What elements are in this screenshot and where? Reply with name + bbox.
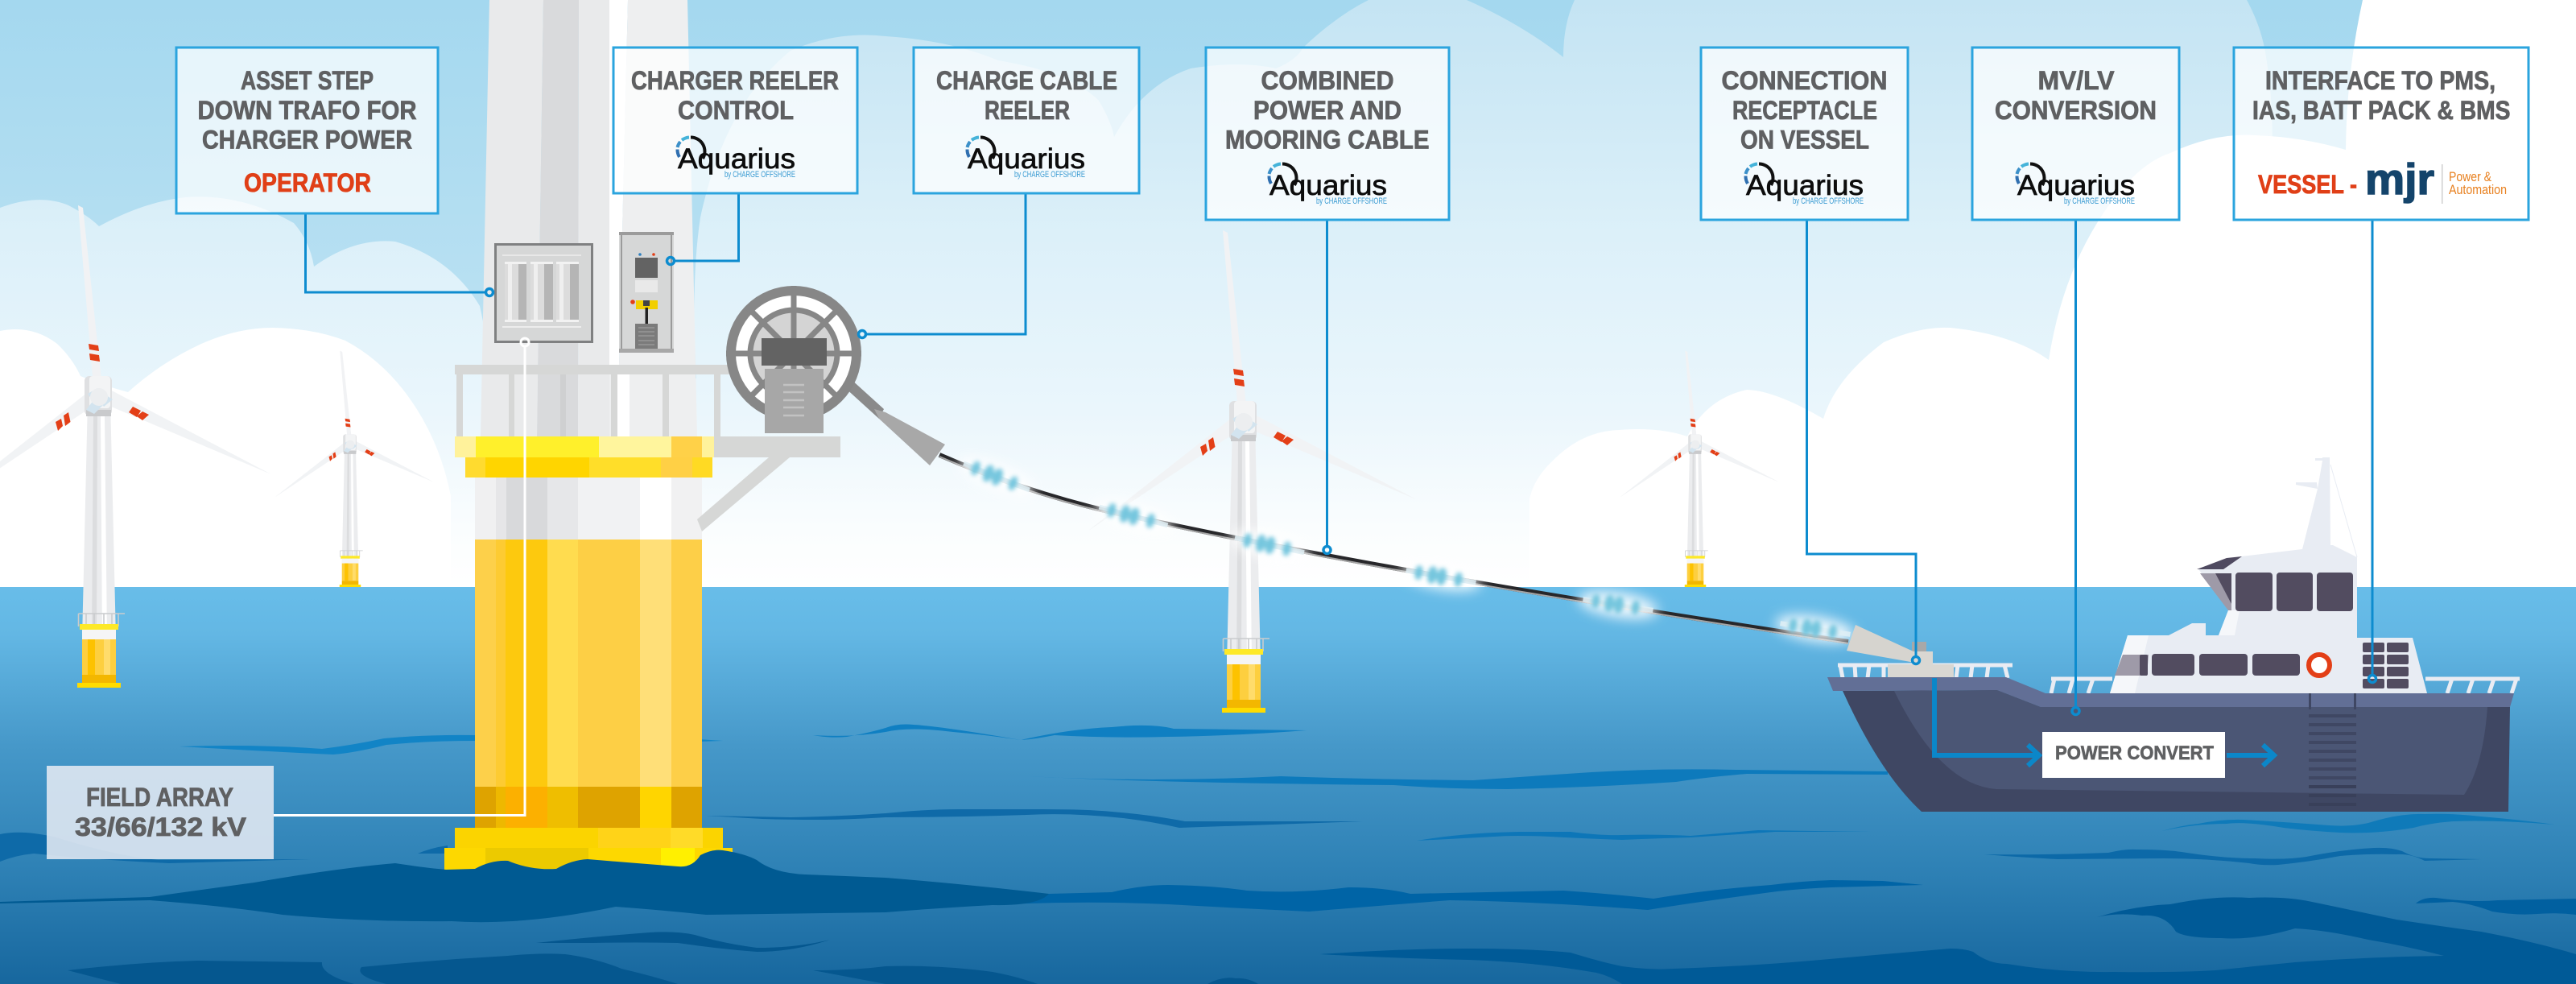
label: charge cable reeler <box>914 48 1139 193</box>
label: interface to PMS: Power & <box>2449 169 2492 184</box>
superstructure <box>2110 457 2427 693</box>
connector: MV/LV conversion <box>2072 220 2079 715</box>
label: asset step down trafo: CHARGER POWER <box>202 126 412 155</box>
upper tower <box>481 0 697 436</box>
label: interface to PMS: VESSEL - <box>2258 170 2357 199</box>
label: combined power and mooring cable: COMBINED <box>1261 66 1394 95</box>
small wind turbine right <box>1619 350 1780 587</box>
label: MV/LV conversion: MV/LV <box>2038 66 2115 95</box>
step-down transformer cabinet <box>496 245 592 341</box>
front white clouds <box>0 0 2576 587</box>
hull ladder <box>2309 693 2356 806</box>
lower deck windows <box>2115 654 2300 676</box>
connector: charger reeler control <box>667 193 739 264</box>
connector: combined cable <box>1323 220 1331 554</box>
far wind turbine left <box>0 205 271 688</box>
centre wind turbine <box>1088 230 1416 713</box>
yellow column <box>475 540 702 828</box>
label: interface to PMS <box>2234 48 2529 220</box>
main turbine tower and foundation <box>444 0 840 892</box>
big foreground waves <box>0 850 2576 984</box>
label: connection receptacle on vessel <box>1701 48 1908 220</box>
rear railings <box>1838 665 2520 693</box>
label: charger reeler control: CHARGER REELER <box>631 66 839 95</box>
wheelhouse windows <box>2200 573 2353 611</box>
hull <box>1843 690 2510 812</box>
power and mooring cable <box>939 455 1848 643</box>
field array connector line <box>274 338 529 815</box>
label: field array <box>47 766 274 859</box>
label: connection receptacle on vessel: ON VESSEL <box>1740 126 1869 155</box>
label: connection receptacle on vessel: RECEPTACLE <box>1732 96 1877 125</box>
lifebuoy <box>2309 655 2330 676</box>
label: MV/LV conversion: CONVERSION <box>1995 96 2157 125</box>
label: combined power and mooring cable <box>1206 48 1449 220</box>
cable glow 5 <box>1576 586 1660 623</box>
lower tower section <box>475 478 702 540</box>
label: charge cable reeler: CHARGE CABLE <box>936 66 1117 95</box>
label: asset step down trafo: OPERATOR <box>244 168 371 197</box>
connector: asset step down trafo <box>306 213 493 296</box>
roof visor <box>2197 556 2242 569</box>
battery pack <box>2363 643 2409 688</box>
cable glow 1 <box>955 450 1038 503</box>
power convert box: POWER CONVERT <box>2055 742 2214 764</box>
label: combined power and mooring cable: POWER AND <box>1253 96 1402 125</box>
connector: connection receptacle <box>1806 220 1919 664</box>
label: interface to PMS: IAS, BATT PACK & BMS <box>2252 96 2510 125</box>
distant waves <box>0 725 2576 984</box>
label: charger reeler control <box>613 48 857 193</box>
connector: interface <box>2368 220 2376 683</box>
upper yellow collar <box>455 436 714 478</box>
label: interface to PMS: INTERFACE TO PMS, <box>2265 66 2496 95</box>
label: charger reeler control: CONTROL <box>678 96 794 125</box>
vessel <box>1827 457 2520 812</box>
cable glow 3 <box>1228 525 1311 565</box>
label: interface to PMS: Automation <box>2449 182 2507 197</box>
cable funnel at reel <box>874 409 945 465</box>
label: MV/LV conversion <box>1972 48 2179 220</box>
platform deck and brace <box>697 436 840 531</box>
sea <box>0 587 2576 984</box>
label: interface to PMS: mjr <box>2365 155 2434 204</box>
cable glow 6 <box>1773 610 1857 647</box>
cable glow 4 <box>1399 558 1483 595</box>
label: field array: FIELD ARRAY <box>86 783 233 812</box>
label: asset step down trafo: DOWN TRAFO FOR <box>198 96 417 125</box>
label: charge cable reeler: REELER <box>985 96 1070 125</box>
label: field array: 33/66/132 kV <box>75 812 247 841</box>
back clouds <box>0 0 2576 587</box>
cable glow 2 <box>1092 494 1175 538</box>
deck band <box>1827 677 2514 707</box>
power convert box <box>2042 732 2225 778</box>
label: asset step down trafo: ASSET STEP <box>241 66 374 95</box>
label: asset step down trafo <box>176 48 438 213</box>
connection receptacle <box>1847 625 1954 677</box>
sky background <box>0 0 2576 587</box>
power flow arrow in <box>1934 678 2039 766</box>
small wind turbine <box>274 350 435 587</box>
foundation base <box>444 828 733 892</box>
cable reel <box>726 286 884 433</box>
label: combined power and mooring cable: MOORING CABLE <box>1225 126 1430 155</box>
power flow arrow out <box>2227 745 2274 766</box>
connector: charge cable reeler <box>858 193 1026 338</box>
label: connection receptacle on vessel: CONNECTION <box>1721 66 1887 95</box>
charger reeler control panel <box>619 232 674 353</box>
platform railing <box>455 365 733 436</box>
